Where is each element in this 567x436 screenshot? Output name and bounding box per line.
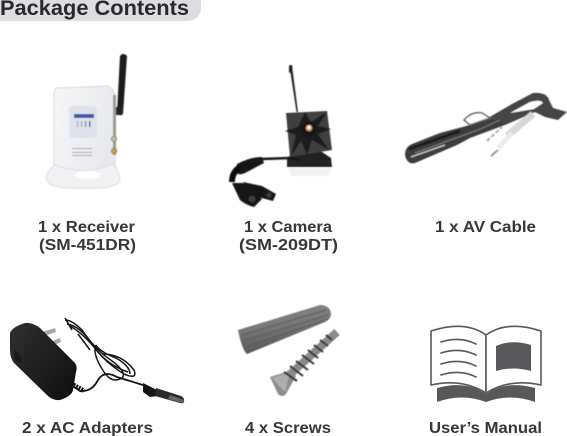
item: user's manual bbox=[429, 326, 542, 436]
label: 1 x AV Cable: 1 x AV Cable bbox=[435, 219, 536, 236]
label: 1 x Camera: 1 x Camera bbox=[244, 219, 332, 236]
icon: AC adapter bbox=[10, 318, 184, 403]
item: receiver bbox=[38, 54, 136, 254]
label: 1 x Receiver: 1 x Receiver bbox=[38, 219, 135, 236]
icon: coiled AV cable bbox=[405, 93, 567, 163]
icon: camera bbox=[232, 65, 332, 207]
label: SM-209DT: (SM-209DT) bbox=[239, 237, 338, 254]
label: SM-451DR: (SM-451DR) bbox=[39, 237, 136, 254]
icon: receiver device bbox=[46, 54, 127, 188]
item: AC adapters bbox=[10, 318, 184, 436]
item: AV cable bbox=[405, 93, 567, 236]
item: camera bbox=[232, 65, 338, 254]
item: screws bbox=[238, 305, 337, 436]
icon: open book bbox=[431, 326, 541, 402]
icon: wall plug and screw bbox=[238, 305, 337, 396]
